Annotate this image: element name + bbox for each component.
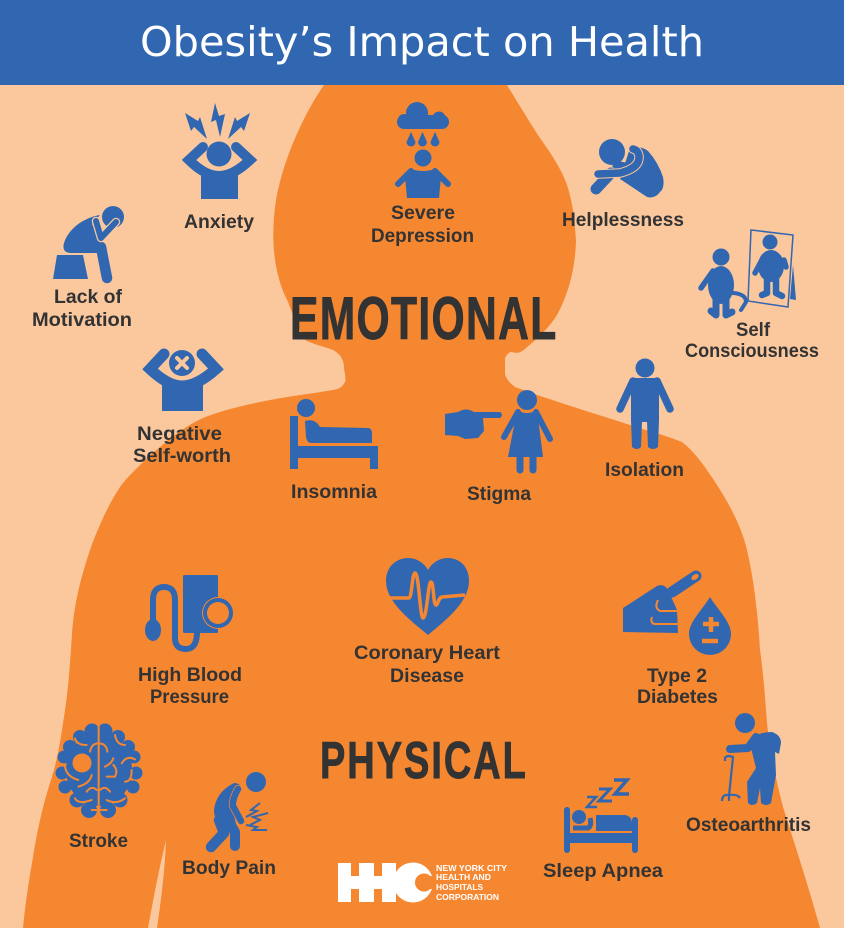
item: negative self-worth xyxy=(133,350,231,467)
logo: HHC xyxy=(338,862,507,902)
item: coronary heart disease: Disease xyxy=(390,665,464,687)
header band xyxy=(0,0,844,85)
item: lack of motivation: Motivation xyxy=(32,309,132,331)
item: type 2 diabetes: Diabetes xyxy=(637,686,718,708)
label: high blood pressure: High Blood xyxy=(138,664,242,686)
item: helplessness xyxy=(562,139,684,231)
icon: lack of motivation xyxy=(53,206,124,279)
icon: isolation xyxy=(620,358,670,449)
icon: sleeping person with Z marks xyxy=(564,780,638,853)
item: stigma xyxy=(445,390,550,505)
title: Obesity’s Impact on Health xyxy=(140,18,704,66)
item: high blood pressure: Pressure xyxy=(150,686,229,708)
label: anxiety: Anxiety xyxy=(184,211,254,233)
logo text: HOSPITALS xyxy=(436,882,483,892)
icon: brain xyxy=(56,724,142,820)
label: sleep apnea: Sleep Apnea xyxy=(543,860,663,882)
icon: helplessness xyxy=(596,139,664,197)
icon: person with cane xyxy=(722,713,781,805)
item: negative self-worth: Self-worth xyxy=(133,445,231,467)
heading: emotional: EMOTIONAL xyxy=(290,286,556,353)
item: type 2 diabetes xyxy=(623,573,731,708)
label: lack of motivation: Lack of xyxy=(54,286,122,308)
logo text: NEW YORK CITY xyxy=(436,863,507,873)
icon: severe depression xyxy=(397,102,449,198)
label: stigma: Stigma xyxy=(467,483,531,505)
label: osteoarthritis: Osteoarthritis xyxy=(686,814,811,836)
item: severe depression xyxy=(371,102,474,247)
logo text: CORPORATION xyxy=(436,892,499,902)
label: type 2 diabetes: Type 2 xyxy=(647,665,707,687)
label: helplessness: Helplessness xyxy=(562,209,684,231)
icon: negative self-worth xyxy=(150,350,216,411)
item: severe depression: Depression xyxy=(371,225,474,247)
item: sleep apnea xyxy=(543,780,663,882)
icon: finger and blood drop xyxy=(623,573,731,655)
icon: stigma xyxy=(445,390,550,470)
item: body pain xyxy=(182,772,276,879)
item: osteoarthritis xyxy=(686,713,811,836)
label: severe depression: Severe xyxy=(391,202,455,224)
item: insomnia xyxy=(290,399,378,503)
label: self consciousness: Self xyxy=(736,319,770,341)
item: anxiety xyxy=(184,103,254,233)
label: coronary heart disease: Coronary Heart xyxy=(354,642,501,664)
item: coronary heart disease xyxy=(354,558,501,687)
item: self consciousness: Consciousness xyxy=(685,340,819,362)
item: stroke xyxy=(56,724,142,852)
label: negative self-worth: Negative xyxy=(137,423,222,445)
label: insomnia: Insomnia xyxy=(291,481,377,503)
item: high blood pressure xyxy=(138,575,242,708)
icon: insomnia xyxy=(290,399,378,469)
icon: blood pressure cuff xyxy=(145,575,234,649)
label: isolation: Isolation xyxy=(605,459,684,481)
item: self consciousness xyxy=(685,230,819,362)
logo mark xyxy=(338,862,436,902)
logo text: HEALTH AND xyxy=(436,872,491,882)
icon: self consciousness xyxy=(701,230,796,315)
icon: bent person with pain xyxy=(211,772,268,847)
item: lack of motivation xyxy=(32,206,132,331)
label: body pain: Body Pain xyxy=(182,857,276,879)
icon: anxiety xyxy=(185,103,250,199)
icon: heart with pulse xyxy=(386,558,469,635)
heading: physical: PHYSICAL xyxy=(320,731,526,789)
logo text xyxy=(436,863,507,902)
item: isolation xyxy=(605,358,684,481)
label: stroke: Stroke xyxy=(69,830,128,852)
